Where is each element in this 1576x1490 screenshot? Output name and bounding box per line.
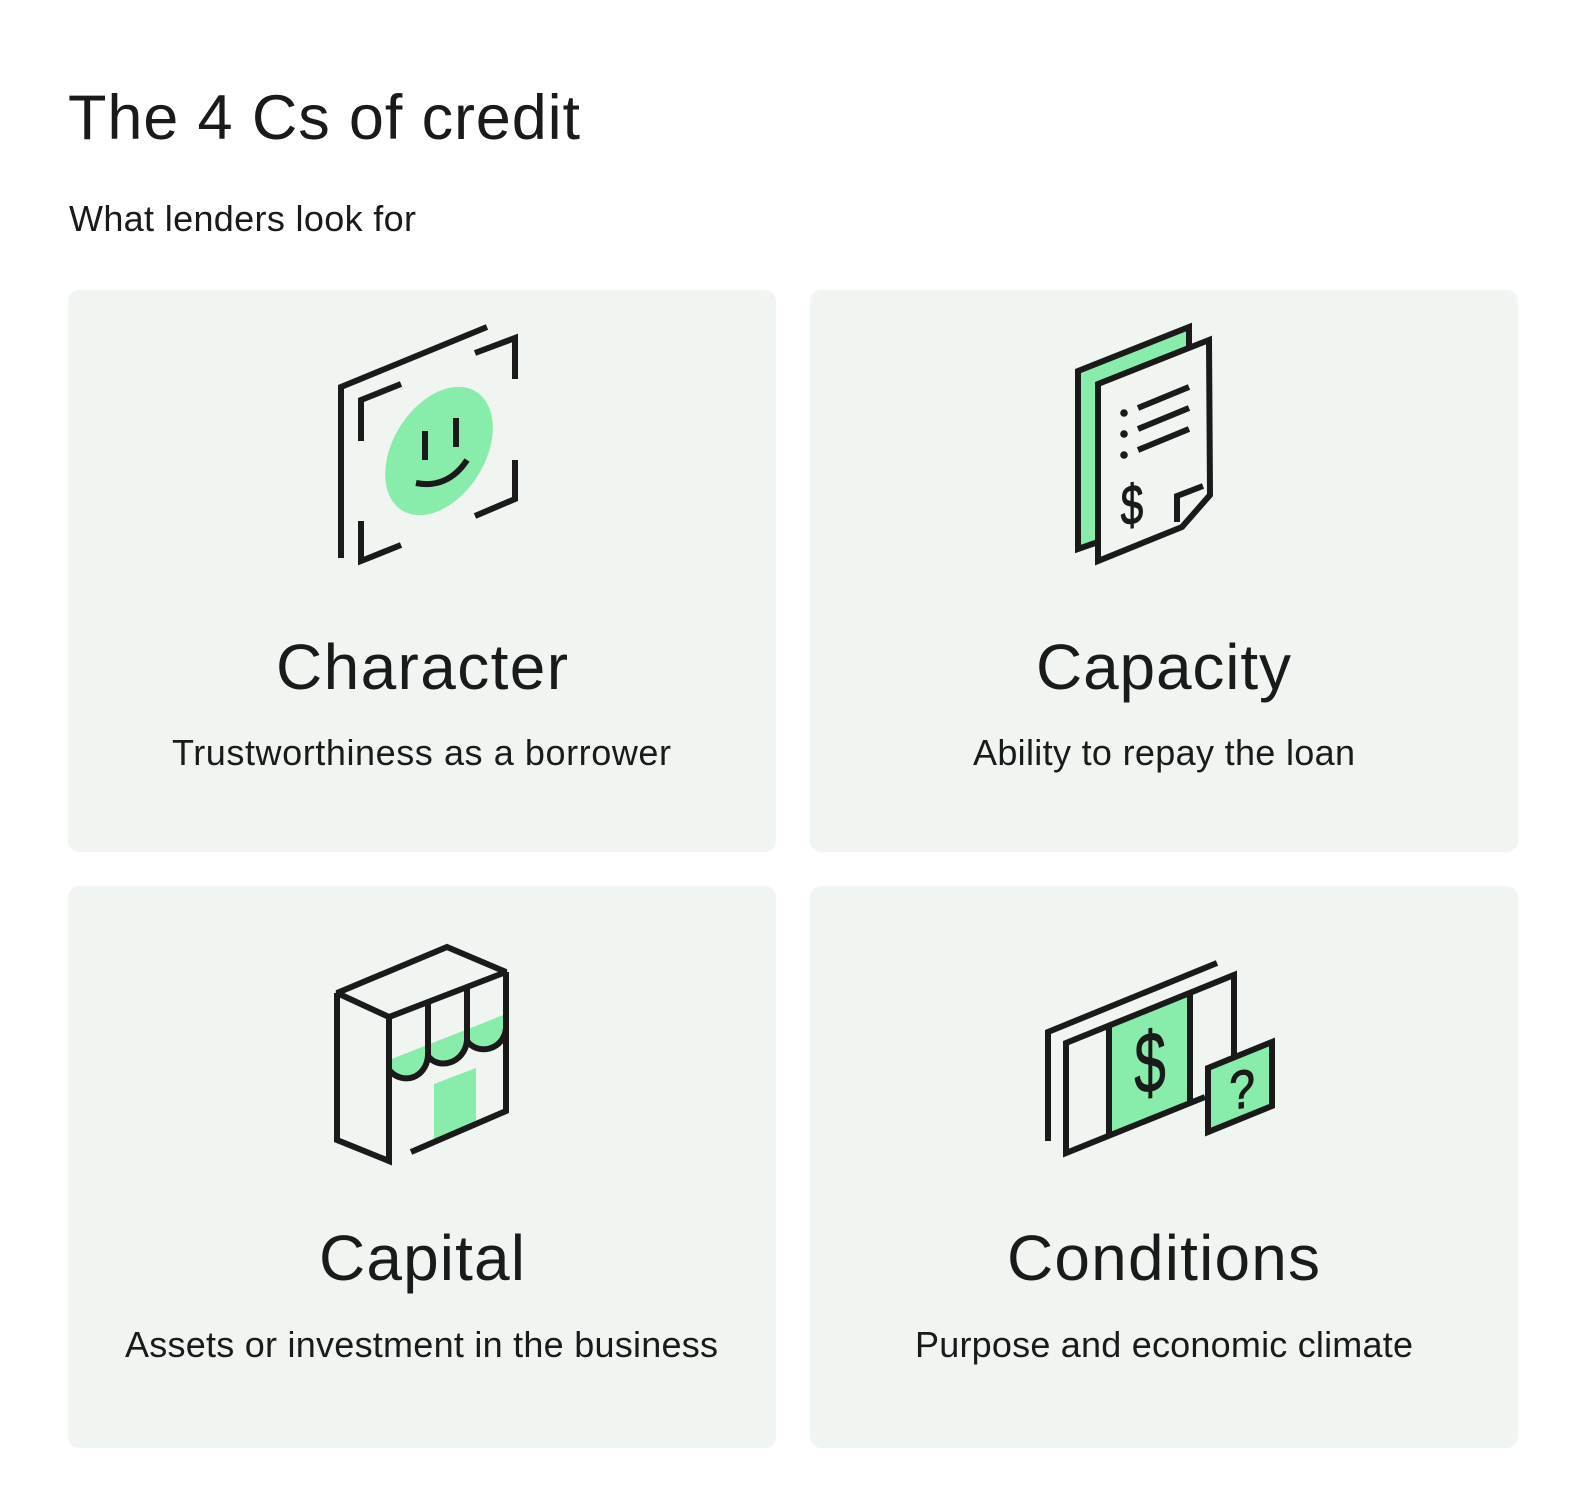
panel: capacity [810,290,1518,852]
heading: Capacity: Capacity [1036,631,1291,703]
icon: financial document: $ [1121,473,1143,538]
description: Capacity: Ability to repay the loan [973,732,1355,773]
description: Character: Trustworthiness as a borrower [172,732,671,773]
heading: Capital: Capital [319,1222,525,1294]
heading: Character: Character [276,631,568,703]
title: The 4 Cs of credit [68,83,580,153]
description: Conditions: Purpose and economic climate [915,1324,1413,1365]
icon: window with dollar and question mark: ? [1229,1057,1255,1122]
panel: conditions [810,886,1518,1448]
icon: storefront [337,947,506,1161]
description: Capital: Assets or investment in the business [125,1324,718,1365]
icon: smiling face in scan frame [341,327,515,561]
panel: character [68,290,776,852]
icon: window with dollar and question mark: $ [1134,1013,1166,1113]
panel: capital [68,886,776,1448]
icon: financial document [1078,327,1210,561]
heading: Conditions: Conditions [1007,1222,1320,1294]
icon: window with dollar and question mark [1048,963,1272,1153]
subtitle: What lenders look for [69,198,416,239]
